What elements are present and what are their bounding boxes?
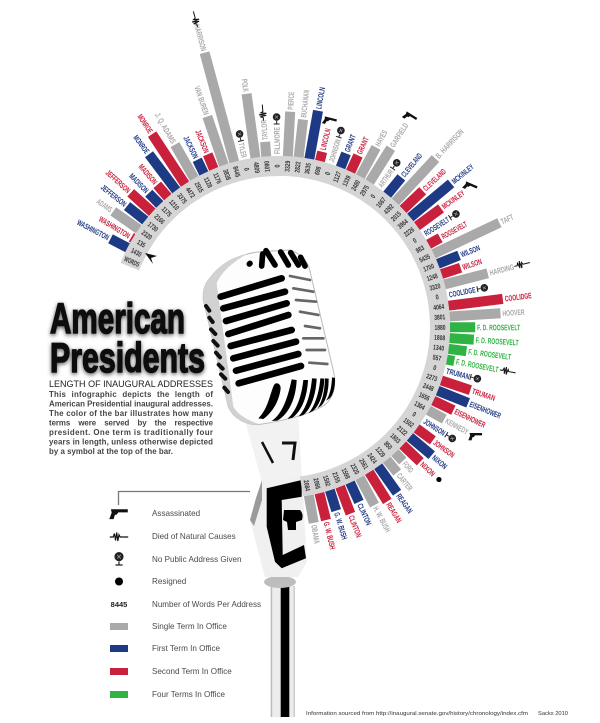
intro paragraph: by a symbol at the top of the bar.	[49, 447, 173, 456]
bar: Wilson first term: 1700	[423, 263, 435, 274]
bar: Coolidge first term, no public address: COOLIDGE	[448, 285, 477, 299]
bar: Madison second term	[136, 162, 182, 212]
bar: G. W. Bush first term: 1592	[321, 475, 331, 487]
bar: Hoover: 3801	[434, 314, 446, 322]
legend: first term: First Term In Office	[152, 644, 221, 653]
bar: Kennedy, assassinated: 1364	[413, 401, 426, 412]
bar: Eisenhower first term: EISENHOWER	[468, 400, 502, 421]
bar: Polk: 4809	[252, 162, 260, 174]
bar: Taft: 5435	[418, 254, 431, 265]
bar: F. D. Roosevelt second term: 1808	[434, 335, 445, 342]
bar: McKinley second term, assassinated	[400, 177, 480, 241]
bar: F. D. Roosevelt second term	[434, 332, 519, 348]
bar: Nixon first term: 2122	[395, 425, 408, 438]
bar: Jefferson first term	[99, 182, 161, 234]
bar: Fillmore, no public address: FILLMORE	[273, 127, 282, 154]
bar: Madison first term: 1175	[160, 206, 172, 219]
bar: F. D. Roosevelt third term	[433, 342, 512, 362]
intro paragraph: The color of the bar illustrates how many	[49, 409, 214, 418]
bar: Jackson first term: JACKSON	[181, 135, 200, 160]
bar: Washington first term: WASHINGTON	[75, 218, 111, 242]
legend: no public address given: No Public Address Given	[152, 555, 242, 564]
microphone illustration	[203, 250, 335, 717]
bar: Carter: 1229	[374, 446, 386, 459]
bar: G. W. Bush second term	[311, 477, 338, 551]
bar: G. W. Bush second term: 2066	[311, 477, 321, 490]
bar: L. Johnson second term: 1502	[402, 417, 415, 429]
source credit: Information sourced from http://inaugural.senate.gov/history/chronology/index.cfm	[306, 711, 528, 717]
radial chart of inaugural address lengths	[75, 10, 533, 551]
bar: Nixon second term, resigned: 1803	[388, 433, 401, 445]
legend: died of natural causes: Died of Natural Causes	[152, 532, 236, 541]
bar: Jefferson first term: JEFFERSON	[99, 183, 128, 209]
bar: B. Harrison	[381, 127, 466, 216]
bar: Fillmore, no public address: 0	[275, 164, 282, 168]
bar: Grant second term	[340, 135, 371, 188]
bar: Eisenhower second term: 1656	[417, 392, 430, 403]
bar: Washington first term	[75, 217, 144, 259]
bar: Pierce: 3329	[285, 161, 292, 172]
bar: A. Johnson, no public address	[323, 126, 347, 176]
ring header: words: WORDS	[123, 256, 140, 269]
bar: H. W. Bush	[348, 462, 393, 534]
bar: Kennedy, assassinated: KENNEDY	[444, 417, 470, 437]
bar: Harding, died of natural causes: HARDING	[489, 263, 515, 278]
bar: Nixon second term, resigned: NIXON	[418, 460, 437, 478]
bar: Clinton first term: 1598	[340, 467, 351, 480]
bar: Carter	[373, 445, 415, 493]
bar: Tyler, no public address: 0	[242, 167, 250, 172]
bar: Wilson first term: WILSON	[459, 243, 481, 259]
bar: Polk	[240, 78, 263, 174]
intro paragraph: This infographic depicts the length of	[49, 390, 213, 399]
bar: Madison first term	[127, 171, 174, 219]
bar: Taft	[417, 212, 515, 265]
bar: Truman first term, no public address: 0	[432, 365, 437, 372]
bar: F. D. Roosevelt third term: F. D. ROOSEVELT	[468, 347, 512, 362]
bar: Grant second term: GRANT	[355, 136, 371, 156]
bar: Reagan first term: 2424	[366, 452, 378, 465]
bar: Washington second term: 135	[135, 239, 146, 250]
intro paragraph: American Presidential inaugural addresses.	[49, 400, 213, 408]
bar: Van Buren: VAN BUREN	[192, 85, 211, 116]
bar: Grant first term	[330, 133, 358, 184]
bar: L. Johnson second term: JOHNSON	[432, 438, 456, 460]
bar: Jackson first term: 1128	[202, 176, 213, 189]
bar: Van Buren	[192, 85, 234, 181]
legend: four terms: Four Terms In Office	[152, 690, 226, 699]
bar: H. W. Bush: 2320	[349, 463, 360, 476]
author credit: Sacks 2010	[538, 711, 568, 717]
bar: Hayes: 2480	[351, 179, 362, 192]
bar: Nixon first term: NIXON	[430, 453, 449, 471]
bar: Truman second term: TRUMAN	[471, 387, 496, 403]
bar: B. Harrison: B. HARRISON	[434, 127, 466, 160]
bar: Lincoln first term	[302, 86, 327, 175]
bar: Grant first term: GRANT	[343, 133, 358, 153]
bar: Nixon first term	[395, 423, 450, 471]
legend connector line	[118, 492, 250, 505]
bar: F. D. Roosevelt first term: 1880	[434, 325, 446, 332]
legend: resigned: Resigned	[152, 577, 186, 586]
bar: Buchanan: 2822	[294, 161, 303, 173]
title: American Presidents: American	[50, 295, 185, 343]
bar: Obama: OBAMA	[309, 524, 321, 545]
bar: Clinton second term: 2155	[330, 471, 341, 484]
bar: Harding, died of natural causes: 3320	[429, 283, 441, 293]
bar: Ford	[382, 439, 416, 475]
bar: Harrison, died of natural causes: HARRISON	[192, 24, 208, 52]
bar: Lincoln second term, assassinated	[310, 116, 337, 176]
bar: Truman second term: 2273	[425, 373, 438, 383]
legend: died of natural causes	[110, 532, 236, 541]
bar: Harrison, died of natural causes: 8445	[231, 166, 241, 178]
bar: Cleveland first term: CLEVELAND	[399, 151, 424, 179]
bar: Tyler, no public address	[234, 129, 251, 172]
bar: Kennedy, assassinated	[412, 397, 485, 446]
bar: L. Johnson second term	[401, 415, 457, 460]
bar: Arthur, no public address: 0	[370, 193, 377, 200]
legend: second term: Second Term In Office	[152, 667, 232, 676]
intro paragraph: years in length, unless otherwise depicted	[49, 438, 213, 446]
bar: Eisenhower second term	[417, 389, 487, 430]
legend: first term	[110, 644, 221, 653]
bar: L. Johnson first term, no public address: 0	[411, 411, 417, 419]
bar: Pierce: PIERCE	[286, 91, 296, 110]
bar: J. Q. Adams: 2915	[193, 181, 204, 194]
legend: number of words: 8445	[111, 600, 127, 609]
bar: Cleveland second term: 2015	[390, 211, 403, 223]
bar: Monroe second term	[135, 112, 198, 200]
bar: Coolidge second term: COOLIDGE	[504, 291, 533, 303]
bar: Tyler, no public address: TYLER	[237, 142, 248, 159]
bar: Garfield, assassinated	[355, 111, 417, 199]
bar: Madison first term: MADISON	[127, 172, 150, 195]
bar: Grant first term: 1127	[333, 171, 343, 184]
bar: Ford: 850	[382, 440, 393, 452]
bar: Monroe first term: 3375	[175, 192, 188, 206]
bar: G. W. Bush second term: G. W. BUSH	[322, 521, 337, 551]
legend: second term	[110, 667, 232, 676]
intro paragraph	[49, 390, 214, 456]
bar: Eisenhower second term: EISENHOWER	[453, 407, 487, 430]
bar: Cleveland first term	[374, 151, 424, 210]
bar: Arthur, no public address	[369, 157, 403, 200]
bar: Garfield, assassinated: 2975	[359, 184, 371, 198]
bar: J. Q. Adams: J. Q. ADAMS	[153, 111, 178, 146]
bar: L. Johnson first term, no public address: JOHNSON	[422, 417, 447, 438]
bar: T. Roosevelt second term: 983	[415, 245, 426, 255]
bar: Taylor, died of natural causes	[257, 104, 272, 172]
mic neck	[246, 412, 302, 482]
mic body with switch plate	[250, 478, 307, 577]
bar: T. Roosevelt second term: ROOSEVELT	[440, 220, 469, 241]
legend: no public address given	[114, 552, 242, 565]
bar: Jefferson second term: 2166	[153, 213, 165, 226]
bar: Hayes	[349, 128, 390, 193]
bar: F. D. Roosevelt first term	[434, 322, 520, 332]
bar: F. D. Roosevelt fourth term, died of natural causes	[432, 352, 517, 378]
legend: four terms	[110, 690, 226, 699]
bar: Arthur, no public address: ARTHUR	[376, 168, 396, 189]
bar: McKinley first term: 3964	[397, 218, 410, 231]
bar: Wilson second term: 1248	[426, 273, 439, 283]
bar: A. Johnson, no public address: JOHNSON	[327, 138, 343, 163]
ring for word counts	[120, 156, 450, 496]
bar: Nixon second term, resigned	[388, 431, 444, 485]
bar: Hoover	[434, 307, 525, 322]
bar: B. Harrison: 4392	[383, 203, 396, 216]
bar: McKinley first term	[395, 161, 476, 231]
bar: Ford: FORD	[401, 460, 415, 475]
bar: Reagan second term	[357, 456, 404, 525]
bar: T. Roosevelt first term, no public address	[411, 208, 462, 245]
bar: Washington first term: 1430	[129, 248, 142, 259]
bar: Adams: ADAMS	[95, 197, 114, 214]
bar: F. D. Roosevelt second term: F. D. ROOSEVELT	[475, 336, 519, 347]
bar: A. Johnson, no public address: 0	[325, 171, 332, 176]
bar: Monroe second term: MONROE	[135, 113, 155, 135]
bar: Taylor, died of natural causes: TAYLOR	[259, 119, 270, 140]
bar: Van Buren: 3838	[221, 169, 231, 181]
bar: Wilson second term: WILSON	[461, 257, 483, 272]
bar: Jefferson first term: 1730	[146, 221, 159, 234]
legend: assassinated	[109, 509, 200, 519]
bar: Wilson first term	[422, 243, 481, 274]
bar: F. D. Roosevelt fourth term, died of natural causes: F. D. ROOSEVELT	[455, 357, 499, 374]
bar: Jackson first term	[181, 134, 215, 190]
bar: Obama: 2084	[302, 480, 311, 492]
bar: Taft: TAFT	[499, 213, 515, 226]
bar: McKinley second term, assassinated: 2226	[403, 227, 416, 239]
bar: Jackson second term: 1176	[211, 172, 222, 185]
bar: Reagan second term: REAGAN	[384, 501, 403, 525]
bar: Adams	[95, 196, 154, 242]
bar: J. Q. Adams	[153, 111, 206, 194]
bar: Clinton first term	[339, 466, 374, 527]
bar: Taylor, died of natural causes: 1090	[264, 161, 272, 172]
bar: Jefferson second term: JEFFERSON	[104, 168, 132, 195]
bar: Cleveland second term	[388, 166, 448, 224]
bar: Buchanan	[292, 89, 311, 173]
bar: Eisenhower first term: 2448	[422, 383, 435, 393]
bar: L. Johnson first term, no public address	[410, 410, 458, 445]
bar: T. Roosevelt first term, no public address: 0	[412, 237, 418, 245]
bar: Hayes: HAYES	[373, 128, 390, 148]
bar: Lincoln second term, assassinated: 698	[314, 166, 323, 176]
bar: Reagan first term	[365, 451, 415, 515]
bar: Lincoln second term, assassinated: LINCOLN	[319, 127, 333, 151]
bar: Coolidge second term	[433, 290, 533, 313]
bar: Coolidge second term: 4064	[433, 304, 445, 312]
legend: assassinated: Assassinated	[152, 509, 200, 518]
bar: H. W. Bush: H. W. BUSH	[371, 505, 392, 534]
title: American Presidents: Presidents	[50, 334, 205, 381]
bar: T. Roosevelt first term, no public address: ROOSEVELT	[423, 215, 451, 238]
bar: Grant second term: 1339	[342, 175, 353, 188]
bar: Madison second term: 1210	[167, 199, 180, 212]
bar: F. D. Roosevelt first term: F. D. ROOSEVELT	[477, 323, 520, 332]
legend: single term	[110, 622, 227, 631]
bar: T. Roosevelt second term	[414, 219, 469, 256]
bar: Reagan first term: REAGAN	[394, 492, 414, 515]
subtitle: LENGTH OF INAUGURAL ADDRESSES	[49, 379, 213, 390]
bar: Coolidge first term, no public address	[435, 283, 489, 302]
bar: Truman first term, no public address	[432, 363, 482, 384]
intro paragraph: president. One term is traditionally four	[49, 428, 213, 437]
bar: Monroe first term: MONROE	[131, 133, 151, 156]
bar: F. D. Roosevelt fourth term, died of natural causes: 557	[432, 354, 442, 363]
bar: Clinton second term: CLINTON	[347, 514, 363, 539]
bar: Carter: CARTER	[395, 471, 414, 493]
title: American Presidents	[50, 295, 205, 381]
bar: Lincoln first term: LINCOLN	[314, 86, 327, 110]
legend: single term: Single Term In Office	[152, 622, 227, 631]
mic stand pole	[271, 586, 295, 717]
bar: Monroe second term: 4472	[184, 187, 196, 200]
bar: Cleveland first term: 1667	[375, 196, 388, 209]
bar: Clinton first term: CLINTON	[355, 502, 373, 527]
bar: Madison second term: MADISON	[137, 162, 159, 187]
bar: Truman second term	[425, 371, 497, 403]
bar: Eisenhower first term	[421, 380, 503, 421]
mic collar	[264, 576, 296, 588]
bar: Garfield, assassinated: GARFIELD	[388, 121, 410, 149]
bar: Truman first term, no public address: TRUMAN	[445, 367, 471, 381]
bar: G. W. Bush first term	[320, 474, 350, 541]
arrow pointing at words header	[145, 253, 157, 264]
bar: Obama	[301, 479, 322, 545]
bar: Cleveland second term: CLEVELAND	[421, 167, 448, 193]
bar: Washington second term: WASHINGTON	[97, 215, 132, 241]
intro paragraph: terms were served by the respective	[49, 418, 214, 428]
bar: Monroe first term	[131, 133, 190, 206]
bar: McKinley second term, assassinated: MCKINLEY	[440, 188, 467, 211]
bar: Reagan second term: 2561	[357, 458, 369, 471]
bar: Coolidge first term, no public address: 0	[435, 294, 440, 302]
bar: Jackson second term	[193, 128, 224, 185]
bar: Harrison, died of natural causes	[189, 10, 243, 178]
mic head	[203, 250, 335, 425]
bar: Buchanan: BUCHANAN	[299, 89, 311, 118]
bar: Jackson second term: JACKSON	[193, 129, 211, 154]
bar: McKinley first term: MCKINLEY	[450, 162, 476, 186]
bar: Clinton second term	[330, 470, 364, 539]
bar: Pierce	[282, 91, 296, 172]
bar: F. D. Roosevelt third term: 1340	[433, 344, 445, 353]
bar: Adams: 2320	[140, 230, 153, 242]
bar: Hoover: HOOVER	[502, 308, 525, 318]
bar: Lincoln first term: 3635	[304, 163, 313, 175]
bar: Wilson second term	[425, 256, 483, 284]
bar: Harding, died of natural causes	[428, 258, 531, 293]
legend	[109, 492, 261, 699]
legend: number of words: Number of Words Per Address	[152, 600, 261, 609]
bar: Polk: POLK	[240, 78, 250, 93]
bar: G. W. Bush first term: G. W. BUSH	[332, 511, 349, 541]
legend: resigned	[115, 577, 186, 586]
bar: Jefferson second term	[104, 168, 167, 226]
